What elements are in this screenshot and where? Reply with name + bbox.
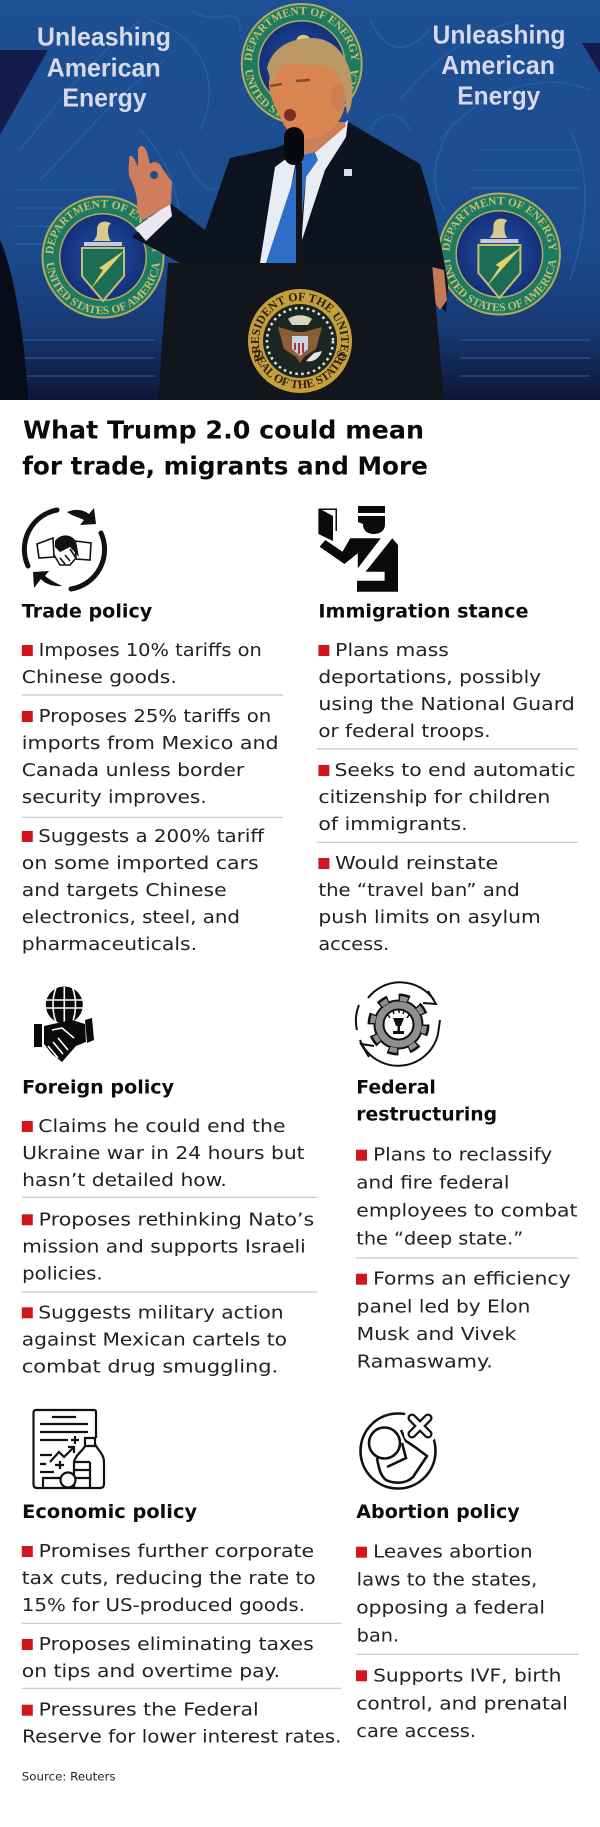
podium — [158, 263, 444, 400]
seal left: DEPARTMENT OF ENERGY — [46, 200, 160, 254]
icon: gear in cycle — [356, 982, 440, 1066]
banner text right: Unleashing — [432, 19, 566, 49]
presidential seal: SEAL OF THE STATES — [254, 351, 346, 388]
bullets: economic policy: on tips and overtime pay. — [22, 1662, 280, 1682]
dark left shape — [0, 50, 48, 135]
bullets: federal restructuring — [356, 1146, 578, 1373]
bullets: foreign policy: mission and supports Israeli — [22, 1237, 306, 1257]
seal top centre: UNITED STATES OF AMERICA — [245, 68, 358, 117]
bullets: immigration stance: access. — [318, 935, 389, 955]
bullets: federal restructuring: Plans to reclassify — [373, 1146, 552, 1166]
dark right shape — [582, 43, 600, 73]
bullets: abortion policy: ban. — [357, 1627, 399, 1647]
bullets: trade policy: Proposes 25% tariffs on — [39, 707, 271, 727]
bullets: abortion policy — [356, 1543, 579, 1742]
heading: trade policy: Trade policy — [22, 602, 152, 623]
dark left figure — [0, 240, 28, 400]
bullets: foreign policy: Proposes rethinking Nato’s — [39, 1210, 314, 1230]
seal right: UNITED STATES OF AMERICA — [444, 258, 556, 312]
icon: document, chart and bottle — [34, 1410, 104, 1488]
icon: trade handshake cycle — [24, 508, 105, 589]
banner text left: American — [47, 53, 161, 83]
bullets: immigration stance — [317, 641, 578, 955]
bullets: immigration stance: Plans mass — [335, 641, 449, 661]
heading: federal restructuring: restructuring — [356, 1105, 497, 1126]
bullets: economic policy: 15% for US-produced goods. — [22, 1596, 305, 1616]
icon: globe and handshake — [34, 986, 94, 1062]
bullets: foreign policy — [22, 1117, 317, 1377]
panel: economic policy — [22, 1410, 341, 1748]
bullets: federal restructuring: Forms an efficiency — [373, 1270, 571, 1290]
bullets: economic policy: Pressures the Federal — [39, 1701, 259, 1721]
seal left — [42, 196, 164, 318]
title: What Trump 2.0 could mean — [23, 415, 424, 444]
seal left: UNITED STATES OF AMERICA — [46, 262, 160, 314]
bullets: trade policy: Canada unless border — [22, 761, 245, 781]
icon: fetus with cross — [360, 1414, 436, 1488]
bullets: foreign policy: Suggests military action — [38, 1303, 284, 1323]
bullets: abortion policy: control, and prenatal — [356, 1694, 568, 1714]
panel: federal restructuring — [356, 982, 578, 1373]
speaker — [129, 38, 448, 312]
bullets: immigration stance: using the National Guard — [318, 695, 575, 715]
bullets: economic policy: tax cuts, reducing the rate to — [22, 1569, 316, 1589]
bullets: trade policy: pharmaceuticals. — [22, 935, 197, 955]
bullets: foreign policy: Ukraine war in 24 hours but — [22, 1144, 305, 1164]
bullets: federal restructuring: the “deep state.” — [356, 1229, 523, 1249]
icon: immigration officer — [318, 506, 398, 592]
heading: federal restructuring: Federal — [356, 1077, 436, 1098]
bullets: trade policy: on some imported cars — [22, 854, 259, 874]
bullets: federal restructuring: employees to combat — [356, 1202, 578, 1222]
bullets: abortion policy: Supports IVF, birth — [373, 1666, 561, 1686]
seal top centre — [240, 3, 363, 122]
bullets: federal restructuring: Ramaswamy. — [357, 1353, 493, 1373]
bullets: trade policy: Suggests a 200% tariff — [38, 827, 265, 847]
seal right — [440, 192, 561, 316]
bullets: economic policy: Promises further corporate — [39, 1542, 314, 1562]
bullets: foreign policy: combat drug smuggling. — [22, 1357, 278, 1377]
panel: immigration stance — [317, 506, 578, 955]
bullets: immigration stance: push limits on asylum — [318, 908, 541, 928]
bullets: federal restructuring: and fire federal — [356, 1173, 509, 1193]
bullets: federal restructuring: Musk and Vivek — [357, 1325, 517, 1345]
panel: abortion policy — [356, 1414, 579, 1742]
banner text right — [432, 19, 566, 110]
banner text left: Energy — [62, 83, 147, 113]
bullets: trade policy: electronics, steel, and — [22, 908, 240, 928]
bullets: abortion policy: care access. — [356, 1722, 476, 1742]
bullets: abortion policy: Leaves abortion — [373, 1543, 533, 1563]
bullets: immigration stance: Would reinstate — [335, 854, 498, 874]
bullets: foreign policy: against Mexican cartels to — [22, 1330, 287, 1350]
bullets: foreign policy: hasn’t detailed how. — [22, 1171, 227, 1191]
bullets: economic policy: Proposes eliminating taxes — [39, 1635, 314, 1655]
seal top centre: DEPARTMENT OF ENERGY — [244, 6, 360, 62]
bullets: economic policy — [22, 1542, 341, 1748]
heading: abortion policy: Abortion policy — [356, 1502, 520, 1523]
source note: Source: Reuters — [22, 1769, 116, 1783]
bullets: immigration stance: citizenship for children — [318, 788, 550, 808]
bullets: federal restructuring: panel led by Elon — [357, 1297, 530, 1317]
seal right: DEPARTMENT OF ENERGY — [442, 196, 557, 252]
banner text right: Energy — [457, 80, 541, 110]
bullets: economic policy: Reserve for lower interest rates. — [22, 1728, 341, 1748]
bullets: immigration stance: Seeks to end automatic — [334, 761, 576, 781]
bullets: foreign policy: policies. — [22, 1264, 103, 1284]
bullets: immigration stance: deportations, possibly — [318, 668, 541, 688]
heading: economic policy: Economic policy — [22, 1502, 197, 1523]
heading: foreign policy: Foreign policy — [22, 1077, 174, 1098]
bullets: trade policy: Chinese goods. — [22, 668, 177, 688]
heading: federal restructuring — [356, 1077, 497, 1126]
panel: trade policy — [22, 508, 283, 955]
title: for trade, migrants and More — [22, 451, 428, 480]
bullets: trade policy — [22, 641, 283, 955]
title — [22, 415, 428, 480]
bullets: foreign policy: Claims he could end the — [38, 1117, 285, 1137]
banner text left — [37, 22, 171, 113]
bullets: trade policy: security improves. — [22, 788, 207, 808]
bullets: immigration stance: the “travel ban” and — [318, 881, 520, 901]
presidential seal: PRESIDENT OF THE UNITED — [251, 292, 349, 362]
bullets: trade policy: Imposes 10% tariffs on — [39, 641, 262, 661]
panel: foreign policy — [22, 986, 317, 1377]
header photo — [0, 0, 600, 400]
bullets: abortion policy: laws to the states, — [357, 1571, 537, 1591]
bullets: immigration stance: or federal troops. — [318, 722, 491, 742]
banner text right: American — [441, 50, 555, 80]
bullets: immigration stance: of immigrants. — [318, 815, 468, 835]
bullets: trade policy: and targets Chinese — [22, 881, 227, 901]
bullets: abortion policy: opposing a federal — [356, 1598, 545, 1618]
banner text left: Unleashing — [37, 22, 171, 52]
heading: immigration stance: Immigration stance — [318, 602, 528, 623]
bullets: trade policy: imports from Mexico and — [22, 734, 279, 754]
